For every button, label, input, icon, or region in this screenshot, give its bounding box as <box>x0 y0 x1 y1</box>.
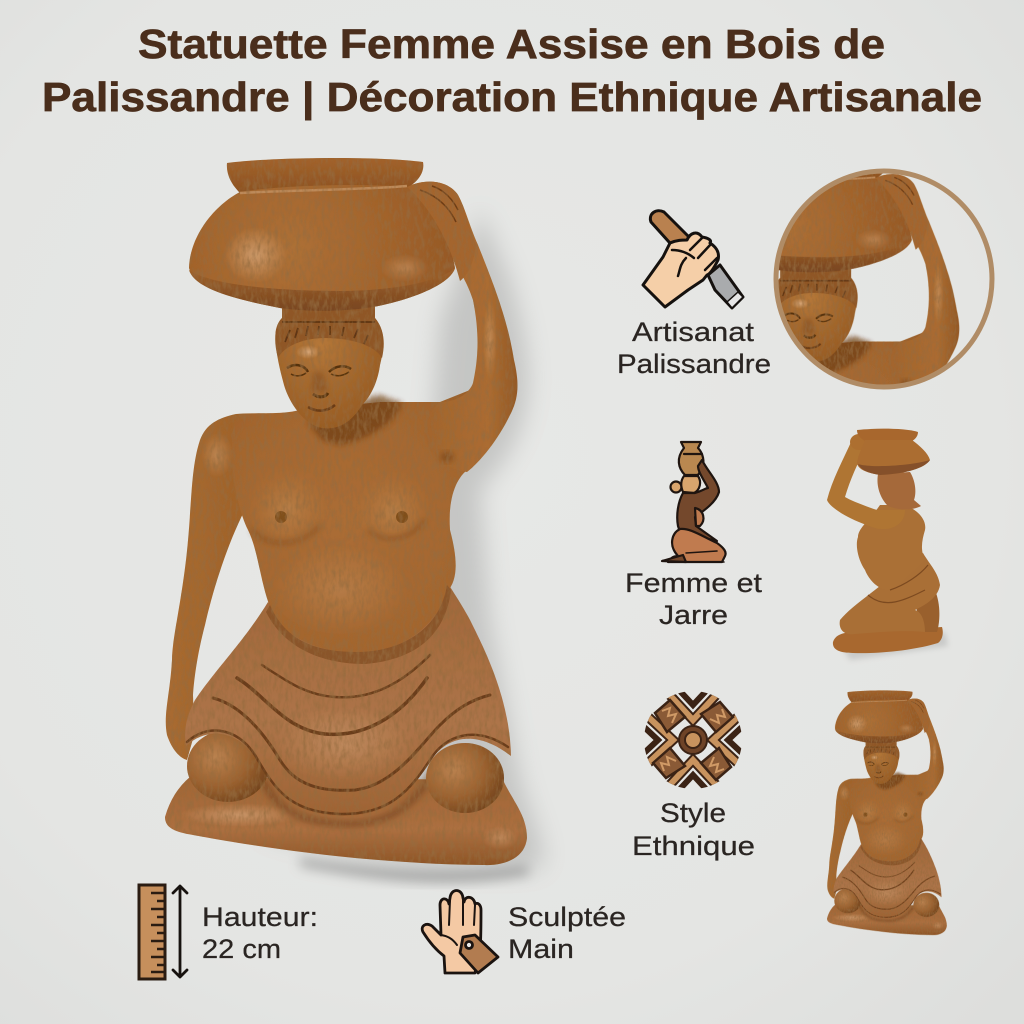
shoulder highlight <box>201 433 233 477</box>
raised right arm <box>407 182 517 472</box>
head <box>275 300 383 428</box>
side head with hair <box>877 472 921 509</box>
label: Style Ethnique: Ethnique <box>632 831 755 861</box>
close-up image <box>778 174 960 384</box>
label: Artisanat Palissandre: Palissandre <box>617 349 771 379</box>
icon: hand holding chisel <box>643 211 743 308</box>
title: Palissandre | Décoration Ethnique Artisanale <box>42 74 982 120</box>
right knee <box>426 743 504 813</box>
side torso <box>857 505 925 590</box>
icon: ruler <box>139 885 165 979</box>
diamonds <box>655 700 685 732</box>
left knee <box>187 730 269 802</box>
side base <box>833 627 943 653</box>
label: Sculptee Main: Main <box>508 934 574 964</box>
label: Hauteur 22 cm: Hauteur: <box>202 902 318 932</box>
neck and chin shadow <box>308 395 402 445</box>
icon: kneeling woman with jar <box>662 442 726 562</box>
armpit mark <box>440 452 454 462</box>
label: Hauteur 22 cm <box>202 902 318 964</box>
label: Femme et Jarre: Femme et <box>625 568 763 598</box>
torso with belly <box>232 390 470 653</box>
side thigh and knee <box>840 553 940 634</box>
forearm highlight <box>483 300 497 380</box>
side view thumbnail shadow <box>840 632 948 660</box>
icon: ethnic round motif <box>643 690 743 790</box>
icon: vertical arrow <box>173 886 187 977</box>
thumbnail: side view of statue <box>827 429 943 653</box>
label: Hauteur 22 cm: 22 cm <box>202 934 281 964</box>
face features <box>287 365 351 411</box>
feature: style ethnique <box>632 690 755 861</box>
belly highlight <box>270 545 410 635</box>
hand finger lines <box>420 186 458 222</box>
right breast <box>357 470 429 546</box>
skirt folds <box>187 655 508 814</box>
panel: close-up circular detail <box>691 156 992 693</box>
skirt highlight <box>275 707 415 783</box>
side lower leg behind <box>915 590 939 632</box>
label: Style Ethnique: Style <box>660 798 726 828</box>
side jar body <box>857 440 930 475</box>
label: Femme et Jarre: Jarre <box>659 600 728 630</box>
main statue: front view in rosewood <box>165 158 527 865</box>
jar highlights <box>223 227 429 283</box>
main statue drop shadow <box>260 210 542 882</box>
side jar underside <box>858 460 930 475</box>
left arm hanging down <box>166 414 250 760</box>
label: Sculptee Main: Sculptée <box>508 902 626 932</box>
left breast <box>247 465 327 545</box>
breast undershadow <box>252 520 425 543</box>
label: Style Ethnique <box>632 798 755 861</box>
label: Sculptee Main <box>508 902 626 964</box>
jar body <box>189 185 455 311</box>
title <box>42 21 982 120</box>
jar rim <box>227 158 423 193</box>
side hand <box>850 434 868 450</box>
side fold <box>868 565 928 603</box>
jar underside <box>189 268 455 311</box>
jar neck ridge <box>240 186 407 193</box>
label: Femme et Jarre <box>625 568 763 630</box>
thumbnail: front view of statue <box>827 690 947 935</box>
side raised arm <box>827 440 905 529</box>
statue base <box>165 777 527 865</box>
hair incisions <box>282 322 375 344</box>
feature: sculptee main <box>422 890 626 973</box>
center rosette <box>679 726 707 754</box>
belt <box>266 585 451 664</box>
icon: hand with tag <box>422 890 498 973</box>
hand gripping jar <box>407 182 476 281</box>
circular frame <box>776 171 992 387</box>
title: Statuette Femme Assise en Bois de <box>138 21 885 67</box>
feature: femme et jarre <box>625 442 763 630</box>
nose shading <box>311 372 328 392</box>
skirt <box>185 585 511 816</box>
nipples <box>275 511 408 523</box>
label: Artisanat Palissandre <box>617 317 771 379</box>
side jar rim <box>857 429 918 441</box>
shadow under skirt wave <box>262 775 432 824</box>
chevrons <box>666 690 720 720</box>
hair <box>275 300 384 358</box>
base highlights <box>180 803 518 850</box>
feature: artisanat <box>617 211 771 379</box>
forehead highlight <box>296 345 320 359</box>
feature: height <box>139 885 318 979</box>
label: Artisanat Palissandre: Artisanat <box>632 317 755 347</box>
